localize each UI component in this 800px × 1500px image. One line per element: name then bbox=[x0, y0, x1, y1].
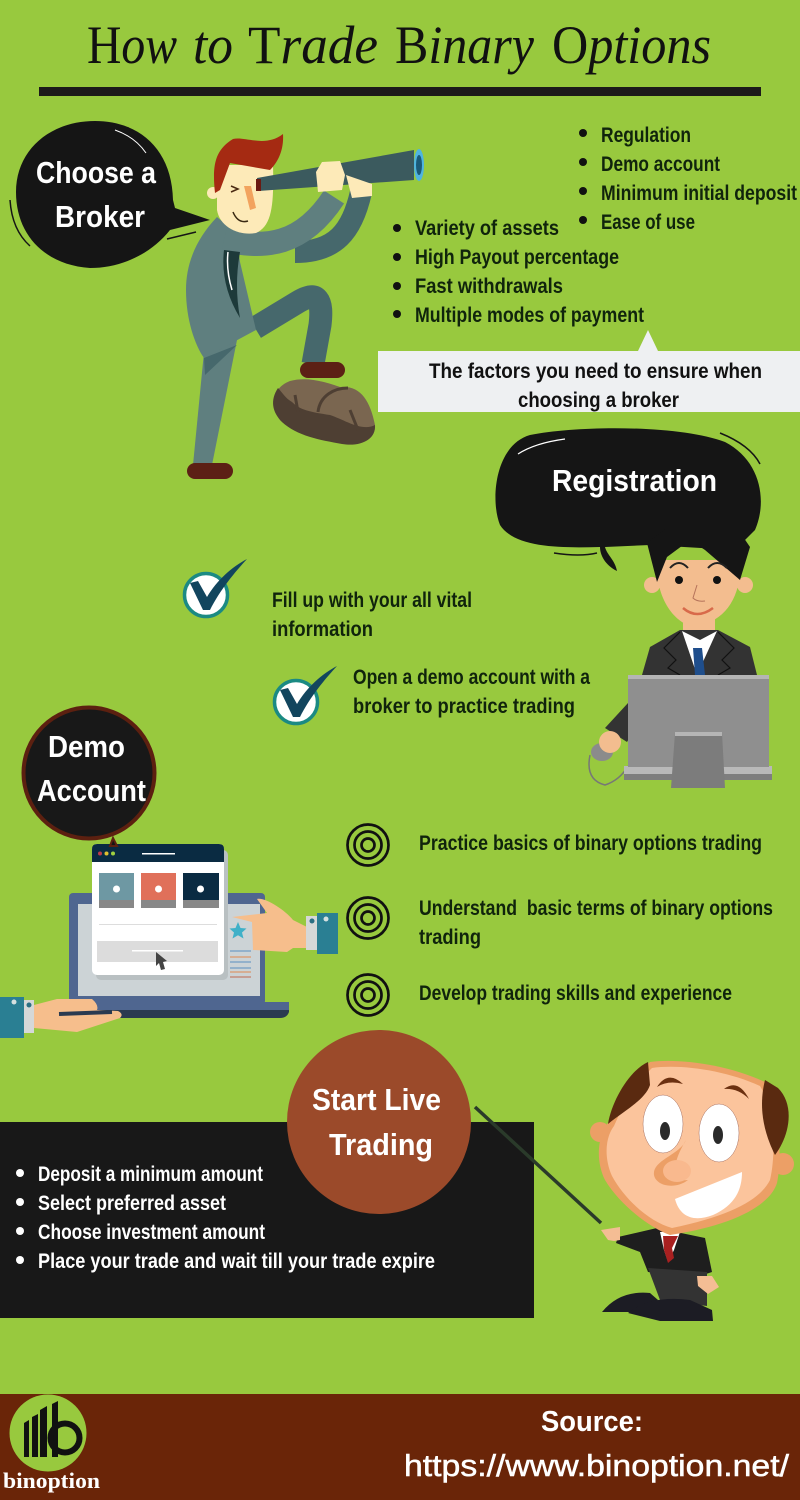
list: broker factors left: Fast withdrawals bbox=[415, 275, 563, 298]
text: open a demo bbox=[353, 666, 590, 718]
text: fill up bbox=[272, 589, 472, 641]
source credit bbox=[404, 1406, 789, 1483]
logo: binoption: binoption bbox=[3, 1468, 100, 1493]
illustration: man at computer bbox=[589, 528, 772, 788]
list: broker factors right: Demo account bbox=[601, 153, 720, 176]
title bbox=[87, 15, 711, 75]
check icon bbox=[274, 666, 337, 724]
panel: live trading steps bbox=[0, 1122, 534, 1318]
text: fill up: information bbox=[272, 618, 373, 641]
list: broker factors right: Ease of use bbox=[601, 211, 695, 234]
list: broker factors right: Regulation bbox=[601, 124, 691, 147]
text: understand: trading bbox=[419, 926, 481, 949]
panel: live trading steps: Select preferred asset bbox=[38, 1192, 226, 1215]
heading badge: start live trading bbox=[287, 1030, 471, 1214]
target icon bbox=[348, 974, 388, 1016]
heading badge: demo account: Account bbox=[37, 773, 146, 808]
list: broker factors left: High Payout percentage bbox=[415, 246, 619, 269]
title: Binary bbox=[395, 15, 534, 75]
title: Trade bbox=[248, 15, 378, 75]
text: understand bbox=[419, 897, 773, 949]
panel: live trading steps: Deposit a minimum amount bbox=[38, 1163, 263, 1186]
text: fill up: Fill up with your all vital bbox=[272, 589, 472, 612]
title: to bbox=[193, 15, 233, 75]
target icon bbox=[348, 898, 388, 938]
heading badge: demo account: Demo bbox=[48, 729, 125, 764]
target icon bbox=[348, 824, 388, 866]
speech bubble: choose a broker bbox=[10, 121, 210, 268]
logo: binoption bbox=[3, 1394, 100, 1493]
illustration: man with telescope bbox=[186, 134, 424, 479]
illustration: cartoon man with pointer bbox=[590, 1061, 794, 1321]
text: develop: Develop trading skills and experience bbox=[419, 982, 732, 1005]
check icon bbox=[184, 559, 247, 616]
illustration: rock bbox=[273, 379, 375, 445]
title: Options bbox=[552, 15, 711, 75]
heading badge: start live trading: Start Live bbox=[312, 1082, 441, 1117]
panel: live trading steps: Choose investment amount bbox=[38, 1221, 265, 1244]
illustration: left hand bbox=[0, 997, 122, 1038]
list: broker factors left bbox=[393, 217, 644, 327]
title: How bbox=[87, 15, 177, 75]
footer bar bbox=[0, 1394, 800, 1500]
text: open a demo: broker to practice trading bbox=[353, 695, 575, 718]
title rule bbox=[39, 87, 761, 96]
list: broker factors left: Multiple modes of payment bbox=[415, 304, 644, 327]
illustration: pointer stick bbox=[475, 1107, 601, 1223]
illustration: laptop with demo window bbox=[60, 844, 289, 1018]
heading: registration: Registration bbox=[552, 463, 717, 498]
list: broker factors left: Variety of assets bbox=[415, 217, 559, 240]
source credit: https://www.binoption.net/ bbox=[404, 1448, 789, 1483]
illustration: right hand bbox=[232, 899, 338, 954]
callout: factors: The factors you need to ensure when bbox=[429, 360, 762, 383]
heading: broker: Broker bbox=[55, 199, 145, 234]
speech bubble: registration bbox=[495, 428, 761, 571]
callout: factors bbox=[378, 330, 800, 412]
text: open a demo: Open a demo account with a bbox=[353, 666, 590, 689]
heading badge: demo account bbox=[24, 708, 154, 846]
list: broker factors right bbox=[579, 124, 797, 234]
callout: factors: choosing a broker bbox=[518, 389, 679, 412]
heading: choose a broker: Choose a bbox=[36, 155, 157, 190]
source credit: Source: bbox=[541, 1406, 643, 1438]
heading badge: start live trading: Trading bbox=[329, 1127, 433, 1162]
panel: live trading steps: Place your trade and wait till your trade expire bbox=[38, 1250, 435, 1273]
